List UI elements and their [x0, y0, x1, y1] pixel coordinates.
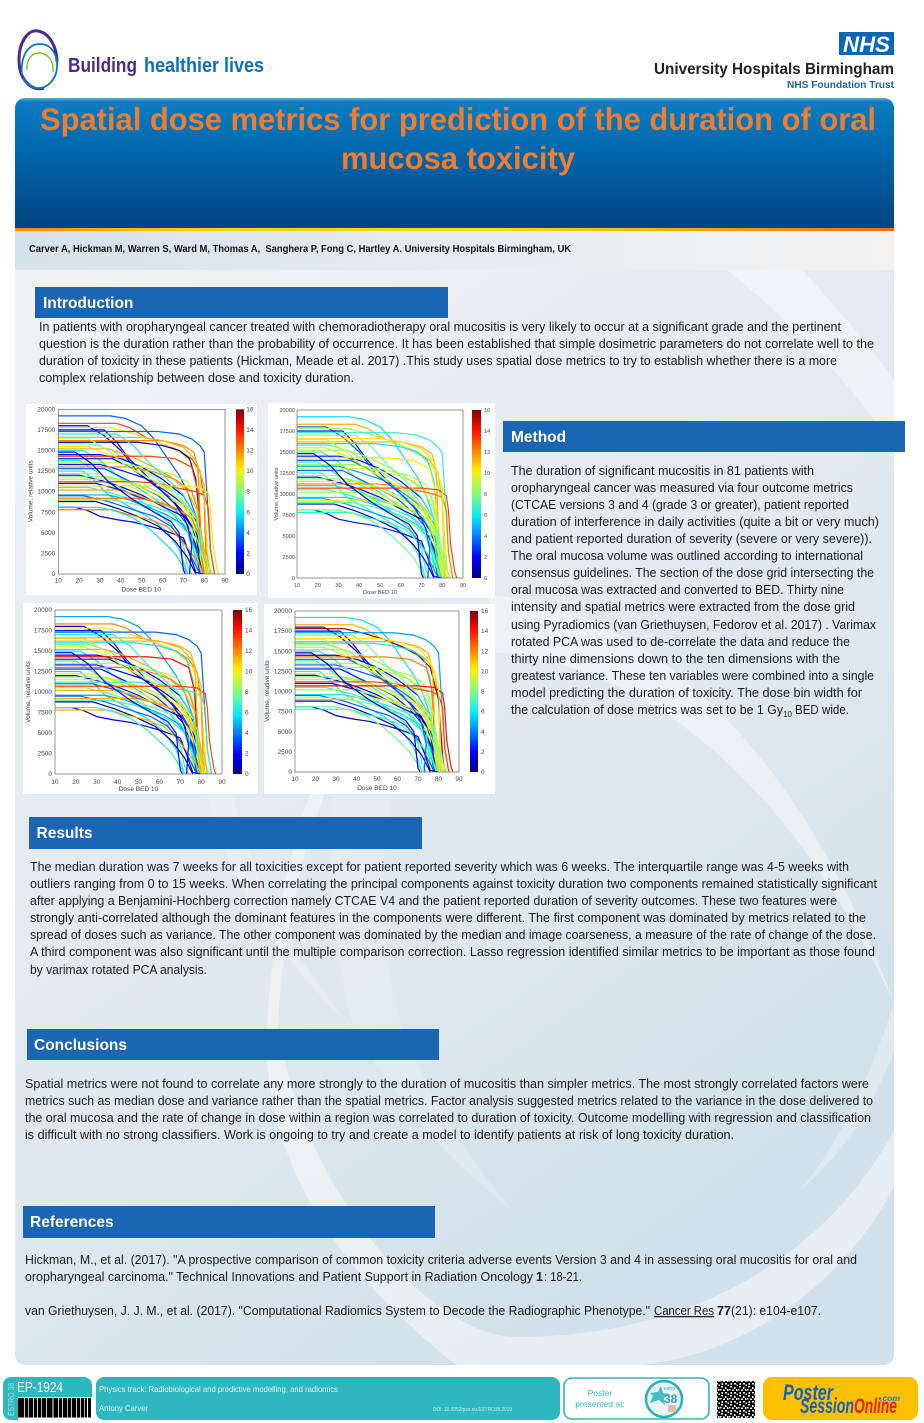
axis titles: Volume, relative units — [27, 460, 34, 522]
colour bar ticks: 12 — [245, 648, 253, 655]
y axis ticks: 2500 — [278, 749, 292, 756]
text block: method: consensus guidelines. The section of the dose grid intersecting the — [511, 566, 874, 580]
colour bar ticks — [245, 607, 253, 778]
text block: conclusions — [25, 1077, 873, 1142]
x axis ticks: 80 — [201, 577, 208, 584]
y axis ticks: 20000 — [34, 607, 52, 614]
text block: references: : 18-21. — [544, 1270, 582, 1284]
icon: overlapping rings — [19, 31, 57, 89]
text block: method — [511, 464, 879, 719]
x axis ticks: 90 — [460, 583, 466, 589]
colour bar ticks: 8 — [246, 489, 250, 496]
y axis ticks: 0 — [288, 769, 292, 776]
text block: method: rotated PCA was used to de-correlate the data and reduce the — [511, 635, 850, 649]
heading: Method: Method — [511, 429, 566, 446]
colour bar ticks: 8 — [245, 689, 249, 696]
curves — [58, 415, 220, 574]
text block: results: by varimax rotated PCA analysis. — [30, 963, 207, 977]
text block: results — [30, 860, 878, 977]
x axis ticks: 20 — [315, 583, 321, 589]
axis titles — [274, 467, 397, 596]
colour bar ticks: 2 — [484, 555, 487, 561]
axis titles: Dose BED 10 — [119, 786, 159, 793]
colour bar ticks: 10 — [481, 668, 489, 675]
y axis ticks — [274, 608, 292, 776]
text block: references: 77 — [717, 1304, 731, 1318]
text block: results: outliers ranging from 0 to 15 weeks. When correlating the principal components against toxicity duration two components remained statistically significant — [30, 877, 878, 891]
text block: introduction: In patients with oropharyngeal cancer treated with chemoradiotherapy oral mucositis is very likely to occur at a significant grade and the pertinent — [39, 320, 842, 334]
text block: references: 1 — [536, 1270, 543, 1284]
colour bar ticks: 0 — [484, 576, 487, 582]
logo: Building healthier lives — [19, 31, 264, 89]
axis titles: Dose BED 10 — [122, 586, 161, 593]
y axis ticks: 2500 — [283, 555, 295, 561]
text block: method: oropharyngeal cancer was measured via four outcome metrics — [511, 481, 853, 495]
colour bar ticks: 8 — [484, 492, 487, 498]
x axis ticks: 80 — [435, 776, 442, 783]
text block: method: (CTCAE versions 3 and 4 (grade 3 or greater), patient reported — [511, 498, 849, 512]
curves — [295, 616, 454, 772]
axis titles: Dose BED 10 — [363, 590, 397, 596]
y axis ticks: 20000 — [279, 408, 295, 414]
y axis ticks: 0 — [52, 571, 56, 578]
heading: References: References — [30, 1214, 114, 1231]
colour bar ticks: 14 — [484, 429, 490, 435]
footer: PosterSessionOnline logo: Session — [800, 1395, 854, 1418]
footer: poster presented at: Poster — [588, 1388, 612, 1398]
y axis ticks: 15000 — [279, 450, 295, 456]
x axis ticks: 70 — [177, 779, 184, 786]
footer: PosterSessionOnline logo: Poster — [783, 1380, 834, 1405]
footer: PosterSessionOnline logo: Online — [854, 1395, 897, 1418]
curves — [55, 616, 216, 774]
y axis ticks — [37, 406, 56, 578]
footer: QR code — [717, 1381, 755, 1418]
colour bar ticks: 16 — [481, 608, 489, 615]
colour bar ticks: 2 — [481, 749, 485, 756]
colour bar ticks: 0 — [481, 769, 485, 776]
text block: introduction — [39, 320, 874, 385]
axis titles: Volume, relative units — [25, 660, 32, 723]
text block: references: Hickman, M., et al. (2017). "A prospective comparison of common toxicity criteria adverse events Version 3 and 4 in assessing oral mucositis for oral and — [25, 1253, 857, 1267]
text block: method: intensity and spatial metrics were extracted from the dose grid — [511, 600, 855, 614]
text block: references — [25, 1253, 857, 1318]
colour bar ticks: 12 — [481, 648, 489, 655]
y axis ticks: 5000 — [38, 730, 52, 737]
colour bar ticks: 14 — [246, 427, 254, 434]
colour bar — [472, 410, 481, 578]
y axis ticks: 15000 — [37, 447, 56, 454]
colour bar ticks: 16 — [245, 607, 253, 614]
footer: track and author bar: Antony Carver — [99, 1403, 148, 1413]
y axis ticks: 17500 — [274, 628, 292, 635]
heading: Results: Results — [36, 825, 92, 842]
text block: conclusions: the oral mucosa and the rate of change in dose within a region was correlated to duration of toxicity. Outcome modelling with regression and classification — [25, 1111, 871, 1125]
colour bar — [236, 409, 244, 574]
colour bar ticks: 10 — [484, 471, 490, 477]
text block: results: The median duration was 7 weeks for all toxicities except for patient reported severity which was 6 weeks. The interquartile range was 4-5 weeks with — [30, 860, 849, 874]
y axis ticks: 15000 — [34, 648, 52, 655]
icon: ESTRO 38 badge: 38 — [664, 1392, 678, 1406]
y axis ticks: 10000 — [279, 492, 295, 498]
y axis ticks: 15000 — [274, 648, 292, 655]
text block: results: spread of doses such as variance. The other component was dominated by the median and image coarseness, a measure of the rate of change of the dose. — [30, 928, 876, 942]
footer: track and author bar: Physics track: Radiobiological and predictive modelling, and radiomics — [99, 1384, 338, 1394]
colour bar — [233, 610, 242, 774]
colour bar ticks: 2 — [245, 750, 249, 758]
x axis ticks — [55, 577, 229, 584]
x axis ticks: 80 — [197, 779, 205, 786]
y axis ticks: 20000 — [37, 406, 56, 413]
y axis ticks: 20000 — [274, 608, 292, 615]
text block: introduction: duration of toxicity in these patients (Hickman, Meade et al. 2017) .This study uses spatial dose metrics to try to establish whether there is a more — [39, 354, 837, 368]
text block: references: oropharyngeal carcinoma." Technical Innovations and Patient Support in Radiation Oncology — [25, 1270, 534, 1284]
y axis ticks: 5000 — [283, 534, 295, 540]
x axis ticks: 70 — [414, 776, 422, 783]
colour bar ticks: 16 — [484, 408, 490, 414]
authors band: Carver A, Hickman M, Warren S, Ward M, Thomas A, Sanghera P, Fong C, Hartley A. University Hospitals Birmingham, UK — [29, 243, 571, 255]
colour bar ticks: 4 — [246, 530, 250, 537]
axis titles — [264, 659, 397, 792]
footer: track and author bar — [96, 1377, 560, 1420]
axis titles: Dose BED 10 — [357, 785, 397, 792]
y axis ticks: 17500 — [37, 427, 56, 434]
text block: conclusions: is difficult with no strong classifiers. Work is ongoing to try and create a model to identify patients at risk of long toxicity duration. — [25, 1128, 734, 1142]
x axis ticks: 50 — [373, 776, 381, 783]
y axis ticks: 7500 — [278, 709, 292, 716]
x axis ticks: 30 — [93, 779, 101, 786]
y axis ticks: 12500 — [274, 668, 292, 675]
footer: poster id and barcode: EP-1924 — [17, 1380, 63, 1396]
footer: PosterSessionOnline logo: .com — [880, 1394, 900, 1403]
x axis ticks — [291, 776, 463, 783]
y axis ticks: 2500 — [38, 750, 52, 758]
chart: dose volume curves, top right — [268, 403, 495, 598]
x axis ticks: 90 — [455, 776, 463, 783]
text block: references: Cancer Res — [654, 1304, 714, 1318]
colour bar ticks — [484, 408, 490, 582]
barcode — [18, 1398, 91, 1418]
colour bar ticks: 12 — [484, 450, 490, 456]
y axis ticks: 7500 — [41, 509, 56, 516]
x axis ticks: 30 — [332, 776, 340, 783]
text block: conclusions: metrics such as median dose and variance rather than the spatial metrics. Factor analysis suggested metrics related to the variance in the dose delivered to — [25, 1094, 873, 1108]
footer: PosterSessionOnline logo — [763, 1377, 918, 1420]
x axis ticks: 90 — [218, 779, 226, 786]
x axis ticks: 40 — [114, 779, 122, 786]
x axis ticks: 40 — [353, 776, 360, 783]
text block: conclusions: Spatial metrics were not found to correlate any more strongly to the duration of mucositis than simpler metrics. The most strongly correlated factors were — [25, 1077, 869, 1091]
footer: poster presented at: presented at: — [575, 1399, 625, 1409]
y axis ticks: 12500 — [279, 471, 295, 477]
x axis ticks: 80 — [439, 583, 445, 589]
colour bar ticks: 6 — [246, 509, 250, 516]
x axis ticks: 50 — [135, 779, 142, 786]
authors band — [15, 231, 894, 270]
x axis ticks: 20 — [312, 776, 319, 783]
text block: method: oral mucosa was extracted and converted to BED. Thirty nine — [511, 583, 844, 597]
curves — [297, 416, 458, 578]
text block: method: The oral mucosa volume was outlined according to international — [511, 549, 863, 563]
title: mucosa toxicity — [341, 140, 575, 176]
x axis ticks — [51, 779, 226, 786]
colour bar ticks: 6 — [484, 513, 487, 519]
x axis ticks: 60 — [159, 577, 166, 584]
text block: method: model predicting the duration of toxicity. The dose bin width for — [511, 686, 862, 700]
text block: references: van Griethuysen, J. J. M., et al. (2017). "Computational Radiomics System to Decode the Radiographic Phenotype." — [25, 1304, 650, 1318]
chart: dose volume curves, bottom right — [264, 604, 495, 794]
x axis ticks: 40 — [356, 583, 362, 589]
x axis ticks: 40 — [117, 577, 125, 584]
footer: poster id and barcode — [3, 1377, 92, 1420]
footer: poster presented at — [564, 1378, 709, 1419]
colour bar ticks: 14 — [481, 628, 489, 635]
y axis ticks: 0 — [292, 576, 295, 582]
axis titles: Volume, relative units — [264, 659, 271, 722]
colour bar ticks: 6 — [245, 710, 249, 716]
x axis ticks: 20 — [75, 577, 83, 584]
colour bar ticks: 6 — [481, 709, 485, 716]
text block: results: after applying a Benjamini-Hochberg correction namely CTCAE V4 and the patient reported duration of severity outcomes. These two features were — [30, 894, 837, 908]
axis titles: Volume, relative units — [274, 467, 280, 521]
colour bar ticks: 4 — [484, 534, 487, 540]
axis titles — [25, 660, 159, 793]
x axis ticks: 10 — [291, 776, 299, 783]
heading: Introduction: Introduction — [43, 295, 133, 312]
x axis ticks: 70 — [180, 577, 187, 584]
text block: method: BED wide. — [795, 703, 849, 717]
y axis ticks: 12500 — [34, 668, 52, 676]
x axis ticks — [294, 583, 466, 589]
colour bar ticks: 4 — [481, 729, 485, 736]
text block: method: 10 — [783, 710, 793, 719]
y axis ticks: 17500 — [34, 628, 52, 634]
footer: poster id and barcode: ESTRO 38 — [7, 1383, 16, 1416]
y axis ticks — [34, 607, 52, 778]
colour bar ticks: 16 — [246, 406, 254, 413]
text block: introduction: question is the duration rather than the probability of occurrence. It has been established that simple dosimetric parameters do not correlate well to the — [39, 337, 874, 351]
logo: NHS University Hospitals Birmingham: University Hospitals Birmingham — [654, 61, 894, 78]
colour bar ticks — [246, 406, 254, 578]
y axis ticks: 10000 — [34, 689, 52, 696]
icon: ESTRO 38 badge: estro — [664, 1386, 675, 1392]
y axis ticks: 7500 — [283, 513, 295, 519]
chart: dose volume curves, bottom left — [23, 603, 258, 794]
text block: method: duration of interference in daily activities (quite a bit or very much) — [511, 515, 879, 529]
y axis ticks: 2500 — [41, 550, 56, 557]
x axis ticks: 50 — [138, 577, 146, 584]
colour bar ticks: 10 — [245, 668, 253, 676]
y axis ticks: 17500 — [279, 429, 295, 435]
text block: method: using Pyradiomics (van Griethuysen, Fedorov et al. 2017) . Varimax — [511, 618, 877, 632]
x axis ticks: 90 — [221, 577, 229, 584]
y axis ticks: 0 — [48, 771, 52, 778]
colour bar ticks: 10 — [246, 468, 254, 475]
y axis ticks: 7500 — [38, 710, 52, 716]
colour bar ticks: 14 — [245, 628, 253, 634]
text block: results: strongly anti-correlated although the dominant features in the components were different. The first component was dominated by metrics related to the — [30, 911, 866, 925]
x axis ticks: 30 — [96, 577, 104, 584]
title — [40, 101, 876, 176]
heading: Conclusions — [27, 1029, 439, 1060]
logo: Building healthier lives: Building — [68, 55, 137, 77]
colour bar ticks: 12 — [246, 447, 254, 454]
text block: method: The duration of significant mucositis in 81 patients with — [511, 464, 814, 478]
text block: method: thirty nine dimensions down to the ten dimensions with the — [511, 652, 840, 666]
chart: dose volume curves, top left — [26, 404, 257, 595]
x axis ticks: 60 — [398, 583, 404, 589]
accent strip — [15, 228, 894, 231]
colour bar ticks — [481, 608, 489, 776]
logo: Building healthier lives: healthier lives — [144, 55, 264, 77]
logo: NHS University Hospitals Birmingham — [654, 32, 894, 91]
title banner — [15, 98, 894, 228]
colour bar ticks: 0 — [245, 771, 249, 778]
icon: ESTRO 38 badge — [646, 1381, 682, 1417]
x axis ticks: 10 — [51, 779, 59, 786]
axis titles — [27, 460, 161, 593]
text block: references: (21): e104-e107. — [731, 1304, 821, 1318]
y axis ticks — [279, 408, 295, 582]
colour bar ticks: 0 — [246, 571, 250, 578]
heading: References — [23, 1206, 435, 1238]
x axis ticks: 30 — [335, 583, 342, 589]
heading: Method — [503, 421, 905, 452]
text block: method: greatest variance. These ten variables were combined into a single — [511, 669, 874, 683]
logo: NHS University Hospitals Birmingham: NHS — [843, 32, 890, 57]
text block: method: the calculation of dose metrics was set to be 1 Gy — [511, 703, 784, 717]
panel: content background — [15, 228, 894, 1365]
text block: results: A third component was also significant until the multiple comparison correction. Lasso regression identified similar metrics to be important as those found — [30, 945, 875, 959]
colour bar ticks: 8 — [481, 688, 485, 696]
heading: Results — [29, 817, 422, 849]
text block: introduction: complex relationship between dose and toxicity duration. — [39, 371, 354, 385]
footer: track and author bar: DOI: 10.3252/pso.eu.ESTRO38.2019 — [433, 1407, 512, 1413]
logo: NHS University Hospitals Birmingham: NHS Foundation Trust — [787, 79, 894, 91]
y axis ticks: 5000 — [278, 729, 292, 736]
text block: method: and patient reported duration of severity (severe or very severe)). — [511, 532, 872, 546]
title: Spatial dose metrics for prediction of the duration of oral — [40, 101, 876, 137]
y axis ticks: 10000 — [37, 489, 56, 496]
x axis ticks: 60 — [156, 779, 163, 786]
x axis ticks: 50 — [377, 583, 383, 589]
x axis ticks: 20 — [72, 779, 80, 786]
heading: Introduction — [35, 287, 448, 318]
x axis ticks: 70 — [418, 583, 425, 589]
heading: Conclusions: Conclusions — [34, 1037, 127, 1054]
colour bar ticks: 2 — [246, 550, 250, 557]
y axis ticks: 5000 — [41, 530, 56, 537]
colour bar — [470, 611, 478, 772]
y axis ticks: 10000 — [274, 688, 292, 696]
x axis ticks: 60 — [394, 776, 401, 783]
colour bar ticks: 4 — [245, 730, 249, 737]
x axis ticks: 10 — [294, 583, 300, 589]
x axis ticks: 10 — [55, 577, 62, 584]
y axis ticks: 12500 — [37, 468, 56, 475]
